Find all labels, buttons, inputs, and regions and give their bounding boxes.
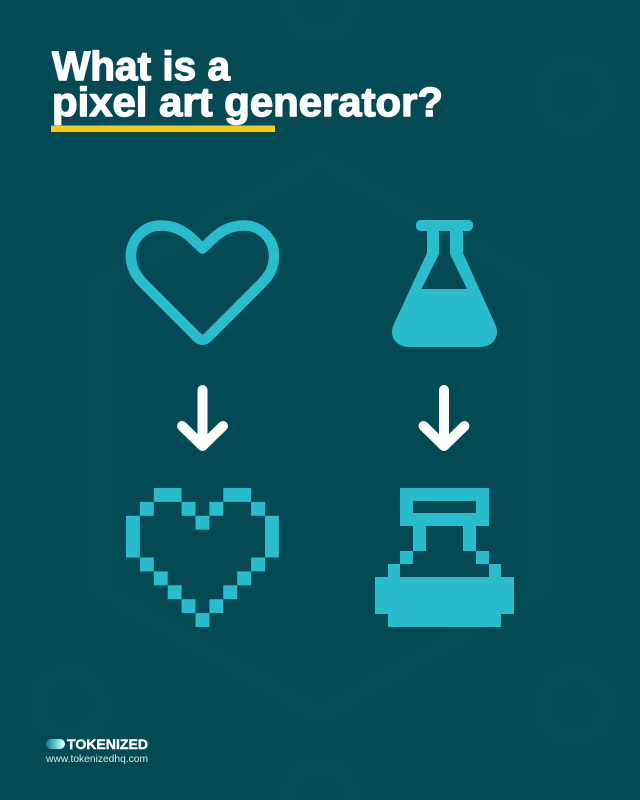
logo wordmark: TOKENIZED xyxy=(67,737,148,752)
title underline xyxy=(51,126,275,132)
logo mark xyxy=(46,739,65,749)
arrow: flask down xyxy=(424,390,464,446)
icon: flask xyxy=(392,220,497,347)
logo: tokenized xyxy=(45,737,148,765)
arrow: heart down xyxy=(182,390,223,446)
title xyxy=(52,43,443,125)
icon: pixel flask xyxy=(375,488,514,627)
title: pixel art generator? xyxy=(52,79,443,125)
title: What is a xyxy=(52,43,231,89)
website url: www.tokenizedhq.com xyxy=(45,753,148,765)
icon: pixel heart xyxy=(126,488,279,627)
icon: outline heart xyxy=(131,226,274,340)
